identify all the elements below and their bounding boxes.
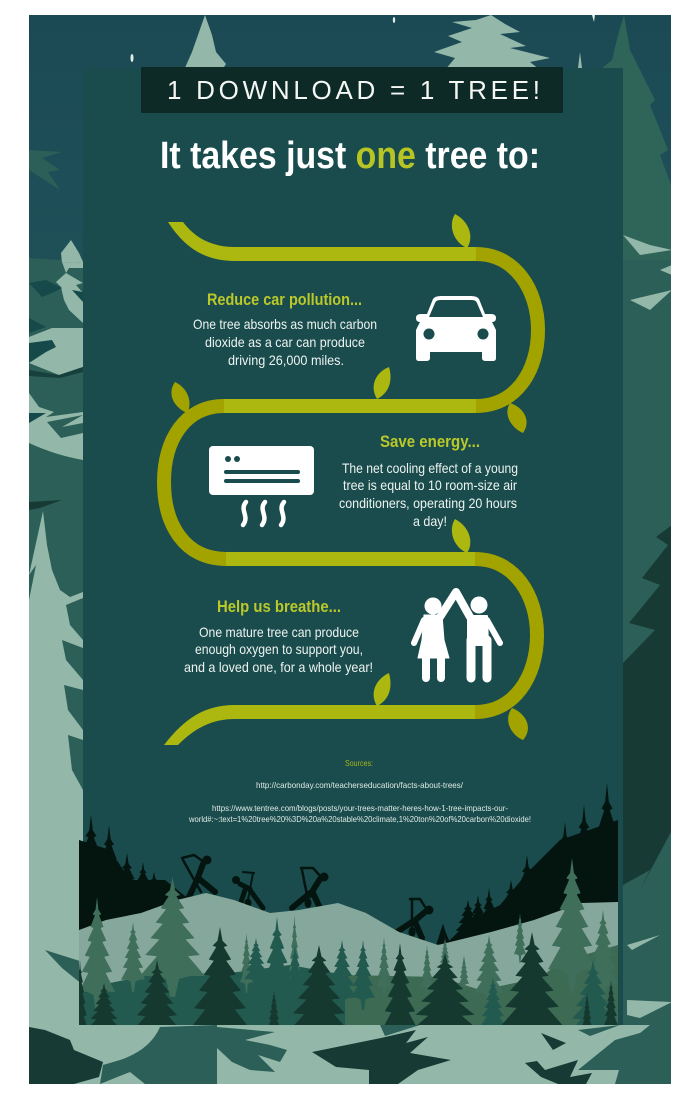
text block: help us breathe: and a loved one, for a whole year!: [184, 659, 373, 675]
mid ground: [79, 945, 618, 1025]
text block: reduce car pollution: [193, 291, 377, 368]
planter silhouettes: [182, 855, 450, 944]
banner: [141, 67, 563, 113]
leaves: [171, 214, 528, 740]
sources: https://www.tentree.com/blogs/posts/your-trees-matter-heres-how-1-tree-impacts-our-: [212, 803, 508, 813]
banner: 1 DOWNLOAD = 1 TREE!: [167, 75, 540, 105]
text block: save energy: tree is equal to 10 room-size air: [343, 477, 517, 493]
left big light tree: [29, 511, 83, 1040]
text block: save energy: Save energy...: [380, 433, 480, 451]
text block: help us breathe: enough oxygen to support you,: [195, 641, 363, 657]
text block: reduce car pollution: One tree absorbs as much carbon: [193, 316, 377, 332]
left upper tree layers: [29, 240, 83, 470]
title: It takes just one tree to:: [160, 135, 540, 177]
top trees: [29, 15, 671, 260]
text block: help us breathe: [184, 598, 373, 675]
sources: http://carbonday.com/teacherseducation/facts-about-trees/: [256, 780, 464, 790]
text block: help us breathe: One mature tree can produce: [199, 624, 359, 640]
dark foreground trees: [79, 927, 618, 1025]
lower-left shards: [45, 950, 79, 982]
forest scene with planters: [79, 784, 618, 1025]
snowy hill: [79, 893, 618, 989]
sources: [188, 758, 531, 824]
icon: car: [416, 296, 496, 361]
text block: reduce car pollution: Reduce car pollution...: [207, 291, 362, 309]
text block: reduce car pollution: driving 26,000 miles.: [228, 352, 344, 368]
icon: air conditioner: [209, 446, 314, 525]
fir and mid-green trees: [79, 858, 618, 1012]
text block: reduce car pollution: dioxide as a car can produce: [205, 334, 365, 350]
icon: two people high five: [414, 592, 500, 678]
text block: save energy: The net cooling effect of a young: [342, 460, 518, 476]
text block: help us breathe: Help us breathe...: [217, 598, 341, 616]
right dark tree: [623, 525, 672, 890]
text block: save energy: [339, 433, 518, 529]
teal trees: [244, 918, 608, 1025]
winding vine with leaves: [164, 214, 538, 745]
bottom strip: [29, 1025, 671, 1084]
sources: Sources:: [345, 758, 373, 768]
main panel: [83, 68, 623, 1025]
text block: save energy: a day!: [413, 513, 447, 529]
dark skyline trees: [79, 784, 618, 942]
text block: save energy: conditioners, operating 20 hours: [339, 495, 517, 511]
sources: world#:~:text=1%20tree%20%3D%20a%20stable%20climate,1%20ton%20of%20carbon%20dioxide!: [188, 814, 531, 824]
